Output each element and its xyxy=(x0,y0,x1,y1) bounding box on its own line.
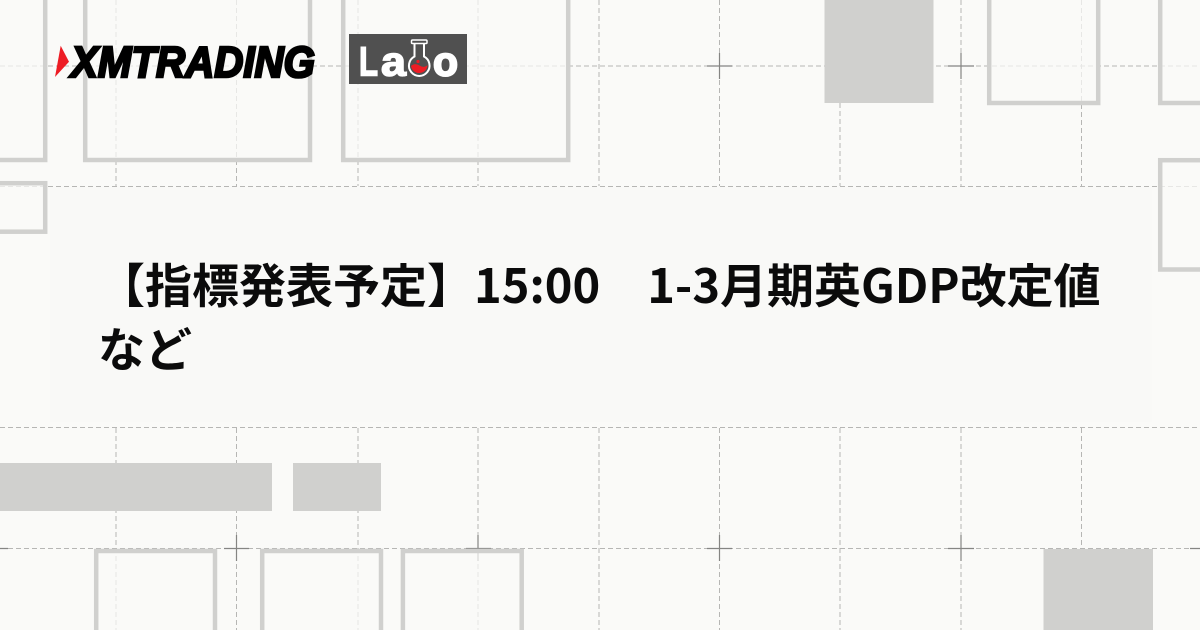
title: など xyxy=(98,312,192,381)
icon: flask xyxy=(409,40,430,76)
logo: XMTRADING: XMTRADING xyxy=(68,38,315,87)
title: 【指標発表予定】15:00 1-3月期英GDP改定値 xyxy=(98,248,1101,317)
title xyxy=(98,248,1101,381)
logo: Lab: a xyxy=(381,38,407,84)
logo: Lab xyxy=(349,34,467,84)
logo: Lab: L xyxy=(359,38,378,84)
logo: Lab: o xyxy=(433,38,458,84)
title panel xyxy=(50,187,1152,422)
